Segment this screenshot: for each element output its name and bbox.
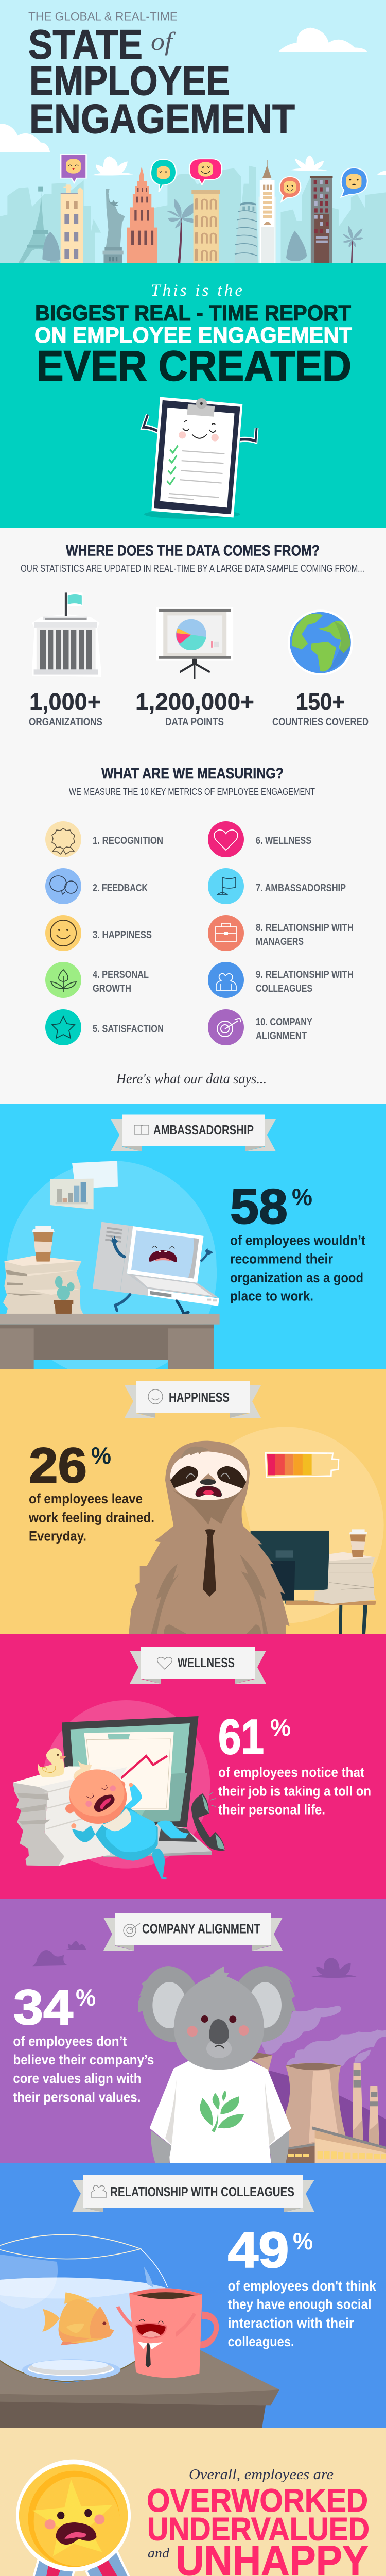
- baby: [74, 1761, 92, 1779]
- papers stack: [3, 1256, 84, 1321]
- mug: [200, 2312, 219, 2348]
- stat: 61 percent: %: [270, 1714, 291, 1741]
- metric: happiness: 3. HAPPINESS: [93, 929, 152, 941]
- metric: feedback: 2. FEEDBACK: [93, 883, 148, 894]
- cactus: [55, 1276, 63, 1288]
- goldfish: [42, 2309, 60, 2332]
- stat: 61 percent: their job is taking a toll on: [218, 1784, 371, 1799]
- paper stack: [13, 1766, 127, 1866]
- laptop keyboard: [103, 1824, 212, 1856]
- smoke: [259, 2006, 386, 2066]
- heading: what are we measuring: WHAT ARE WE MEASURING?: [101, 765, 284, 782]
- ribbon: relationship with colleagues: RELATIONSHIP WITH COLLEAGUES: [110, 2184, 294, 2199]
- metric: company alignment: 10. COMPANY: [256, 1016, 313, 1028]
- arches building: [191, 190, 220, 263]
- metric: relationship with managers: 8. RELATIONSHIP WITH: [256, 922, 354, 934]
- metric: recognition: [45, 821, 163, 857]
- ribbon: happiness: [125, 1381, 261, 1418]
- ribbon: company alignment: [103, 1913, 283, 1951]
- ribbon: happiness: HAPPINESS: [169, 1389, 230, 1405]
- title: of: [151, 27, 176, 56]
- title: [28, 10, 295, 142]
- stat: data points: [135, 688, 254, 728]
- stat: 58 percent: place to work.: [230, 1289, 313, 1304]
- phone: [191, 1793, 225, 1851]
- metric: personal growth: 4. PERSONAL: [93, 969, 149, 980]
- duck: [38, 1748, 64, 1777]
- stat: 34 percent: core values align with: [13, 2071, 141, 2086]
- panel: relationship with colleagues: [0, 2163, 386, 2428]
- metric: happiness: [45, 915, 152, 951]
- conclusion text: [147, 2466, 370, 2576]
- ribbon: wellness: WELLNESS: [178, 1655, 235, 1670]
- heading: what are we measuring: [69, 765, 315, 797]
- illustration: goldfish bowl and mug: [0, 2234, 279, 2428]
- speech bubble: teal: [151, 159, 176, 192]
- icon: globe: [288, 609, 353, 675]
- stat: 34 percent: 34: [13, 1980, 73, 2035]
- stat: 61 percent: of employees notice that: [218, 1765, 364, 1780]
- desk: [0, 1314, 220, 1325]
- speech bubble: purple: [61, 155, 86, 183]
- icon: clipboard mascot: [143, 397, 257, 519]
- stat: 58 percent: [230, 1179, 365, 1304]
- stat: 34 percent: their personal values.: [13, 2090, 141, 2105]
- leaning tower: [235, 202, 257, 263]
- metric: recognition: 1. RECOGNITION: [93, 835, 163, 846]
- stat: 49 percent: %: [293, 2228, 313, 2255]
- stat: 49 percent: interaction with their: [228, 2315, 354, 2331]
- stat: 49 percent: they have enough social: [228, 2297, 372, 2312]
- metric: satisfaction: 5. SATISFACTION: [93, 1024, 164, 1035]
- skyline illustration: [0, 124, 386, 263]
- heading: what are we measuring: WE MEASURE THE 10 KEY METRICS OF EMPLOYEE ENGAGEMENT: [69, 787, 315, 797]
- white tower: [258, 160, 276, 263]
- monitor: [251, 1531, 329, 1590]
- coffee cup: [33, 1232, 53, 1262]
- eiffel tower: [19, 180, 60, 263]
- stat: 58 percent: 58: [230, 1179, 288, 1234]
- report headline: [34, 301, 352, 389]
- cloud: top right: [278, 28, 367, 52]
- metric: relationship with colleagues: 9. RELATIONSHIP WITH: [256, 969, 354, 980]
- heading: where does the data come from: WHERE DOES THE DATA COMES FROM?: [66, 542, 320, 560]
- shirt leaf logo: [200, 2090, 244, 2132]
- panel: company alignment: [0, 1899, 386, 2163]
- conclusion text: UNDERVALUED: [147, 2512, 370, 2548]
- illustration: crying baby at desk: [13, 1700, 225, 1879]
- stat: 61 percent: [218, 1709, 371, 1818]
- metric: company alignment: ALIGNMENT: [256, 1030, 307, 1042]
- stat: 58 percent: recommend their: [230, 1251, 333, 1267]
- panel: happiness: [0, 1369, 386, 1634]
- stat: organizations: 1,000+: [29, 688, 101, 715]
- metric: relationship with managers: [208, 915, 354, 951]
- title: STATE: [28, 22, 143, 67]
- paper stack and cup: [314, 1552, 376, 1604]
- stat: 34 percent: believe their company’s: [13, 2052, 154, 2067]
- title: ENGAGEMENT: [29, 96, 295, 142]
- panel: biggest report: [0, 263, 386, 528]
- stat: 26 percent: of employees leave: [29, 1491, 143, 1506]
- ribbon: company alignment: COMPANY ALIGNMENT: [142, 1921, 260, 1937]
- cream apartment building: [61, 184, 83, 263]
- cooling towers: [247, 2052, 272, 2071]
- conclusion text: Overall, employees are: [189, 2466, 334, 2483]
- icon: building: [32, 592, 101, 677]
- stat: 26 percent: 26: [29, 1438, 87, 1493]
- stat: 58 percent: of employees wouldn’t: [230, 1233, 365, 1248]
- stat: 61 percent: 61: [218, 1709, 264, 1765]
- metric: satisfaction: [45, 1009, 164, 1045]
- stat: 34 percent: %: [76, 1984, 96, 2011]
- koala arms and shirt: [151, 2130, 289, 2163]
- panel: overall conclusion: [0, 2428, 386, 2576]
- panel: hero header: [0, 0, 386, 263]
- stat: organizations: ORGANIZATIONS: [29, 716, 102, 728]
- metric: relationship with managers: MANAGERS: [256, 936, 304, 947]
- ribbon: ambassadorship: [111, 1115, 276, 1151]
- dark building: [310, 176, 332, 263]
- icon: projector with pie chart: [156, 607, 233, 679]
- metric: company alignment: [208, 1009, 313, 1045]
- ribbon: relationship with colleagues: [72, 2175, 314, 2212]
- metric: ambassadorship: 7. AMBASSADORSHIP: [256, 883, 346, 894]
- stat: 49 percent: 49: [228, 2222, 289, 2278]
- heading: where does the data come from: [21, 542, 364, 574]
- palm tree: [167, 199, 194, 263]
- stat: 26 percent: Everyday.: [29, 1529, 86, 1544]
- metric: feedback: [45, 868, 148, 904]
- factory: [286, 2143, 315, 2163]
- icon: shocked medal: [16, 2460, 136, 2576]
- metric: relationship with colleagues: COLLEAGUES: [256, 983, 312, 994]
- stat: 58 percent: %: [292, 1183, 312, 1210]
- metric: ambassadorship: [208, 868, 346, 904]
- intro script line: This is the: [151, 281, 242, 300]
- report headline: ON EMPLOYEE ENGAGEMENT: [34, 323, 352, 348]
- ribbon: wellness: [130, 1647, 266, 1684]
- background clouds: [32, 1941, 86, 1966]
- conclusion text: and: [148, 2546, 170, 2561]
- stat: 61 percent: their personal life.: [218, 1802, 325, 1818]
- stat: countries: 150+: [296, 688, 345, 715]
- statue of liberty: [103, 189, 125, 263]
- stat: 49 percent: colleagues.: [228, 2334, 294, 2349]
- report headline: EVER CREATED: [37, 342, 352, 389]
- small palm: [343, 226, 363, 263]
- metric: relationship with colleagues: [208, 962, 354, 998]
- stat: 26 percent: [28, 1438, 154, 1544]
- koala head: [174, 1967, 264, 2070]
- stat: 26 percent: work feeling drained.: [28, 1510, 154, 1525]
- stat: 34 percent: [13, 1980, 154, 2105]
- red tower: [127, 166, 157, 263]
- stat: 49 percent: [228, 2222, 376, 2349]
- metric: personal growth: [45, 962, 149, 998]
- stat: data points: 1,200,000+: [135, 688, 254, 715]
- metric: personal growth: GROWTH: [93, 983, 131, 994]
- stat: organizations: [29, 688, 102, 728]
- stat: 26 percent: %: [91, 1442, 111, 1469]
- title: EMPLOYEE: [29, 58, 230, 104]
- sloth body: [128, 1441, 290, 1634]
- metric: wellness: [208, 821, 311, 857]
- illustration: panicking laptop on desk: [0, 1161, 220, 1369]
- stat: countries: [272, 688, 369, 728]
- stat: 34 percent: of employees don’t: [13, 2033, 127, 2049]
- report headline: BIGGEST REAL - TIME REPORT: [35, 301, 351, 326]
- conclusion text: OVERWORKED: [147, 2483, 368, 2519]
- ribbon: ambassadorship: AMBASSADORSHIP: [153, 1122, 254, 1138]
- speech bubble: orange: [279, 177, 301, 202]
- transition line: Here's what our data says...: [116, 1071, 267, 1087]
- title: THE GLOBAL & REAL-TIME: [28, 10, 178, 23]
- panel: data sources and metrics: [0, 528, 386, 1105]
- koala ears: [138, 1966, 197, 2042]
- stat: 58 percent: organization as a good: [230, 1270, 363, 1285]
- speech bubble: pink: [189, 159, 222, 185]
- metric: wellness: 6. WELLNESS: [256, 835, 311, 846]
- stat: data points: DATA POINTS: [165, 716, 224, 728]
- illustration: koala and factory: [138, 1958, 386, 2163]
- panel: ambassadorship: [0, 1104, 386, 1369]
- panel: wellness: [0, 1634, 386, 1899]
- illustration: drained sloth: [128, 1427, 384, 1634]
- speech bubble: blue: [341, 168, 367, 197]
